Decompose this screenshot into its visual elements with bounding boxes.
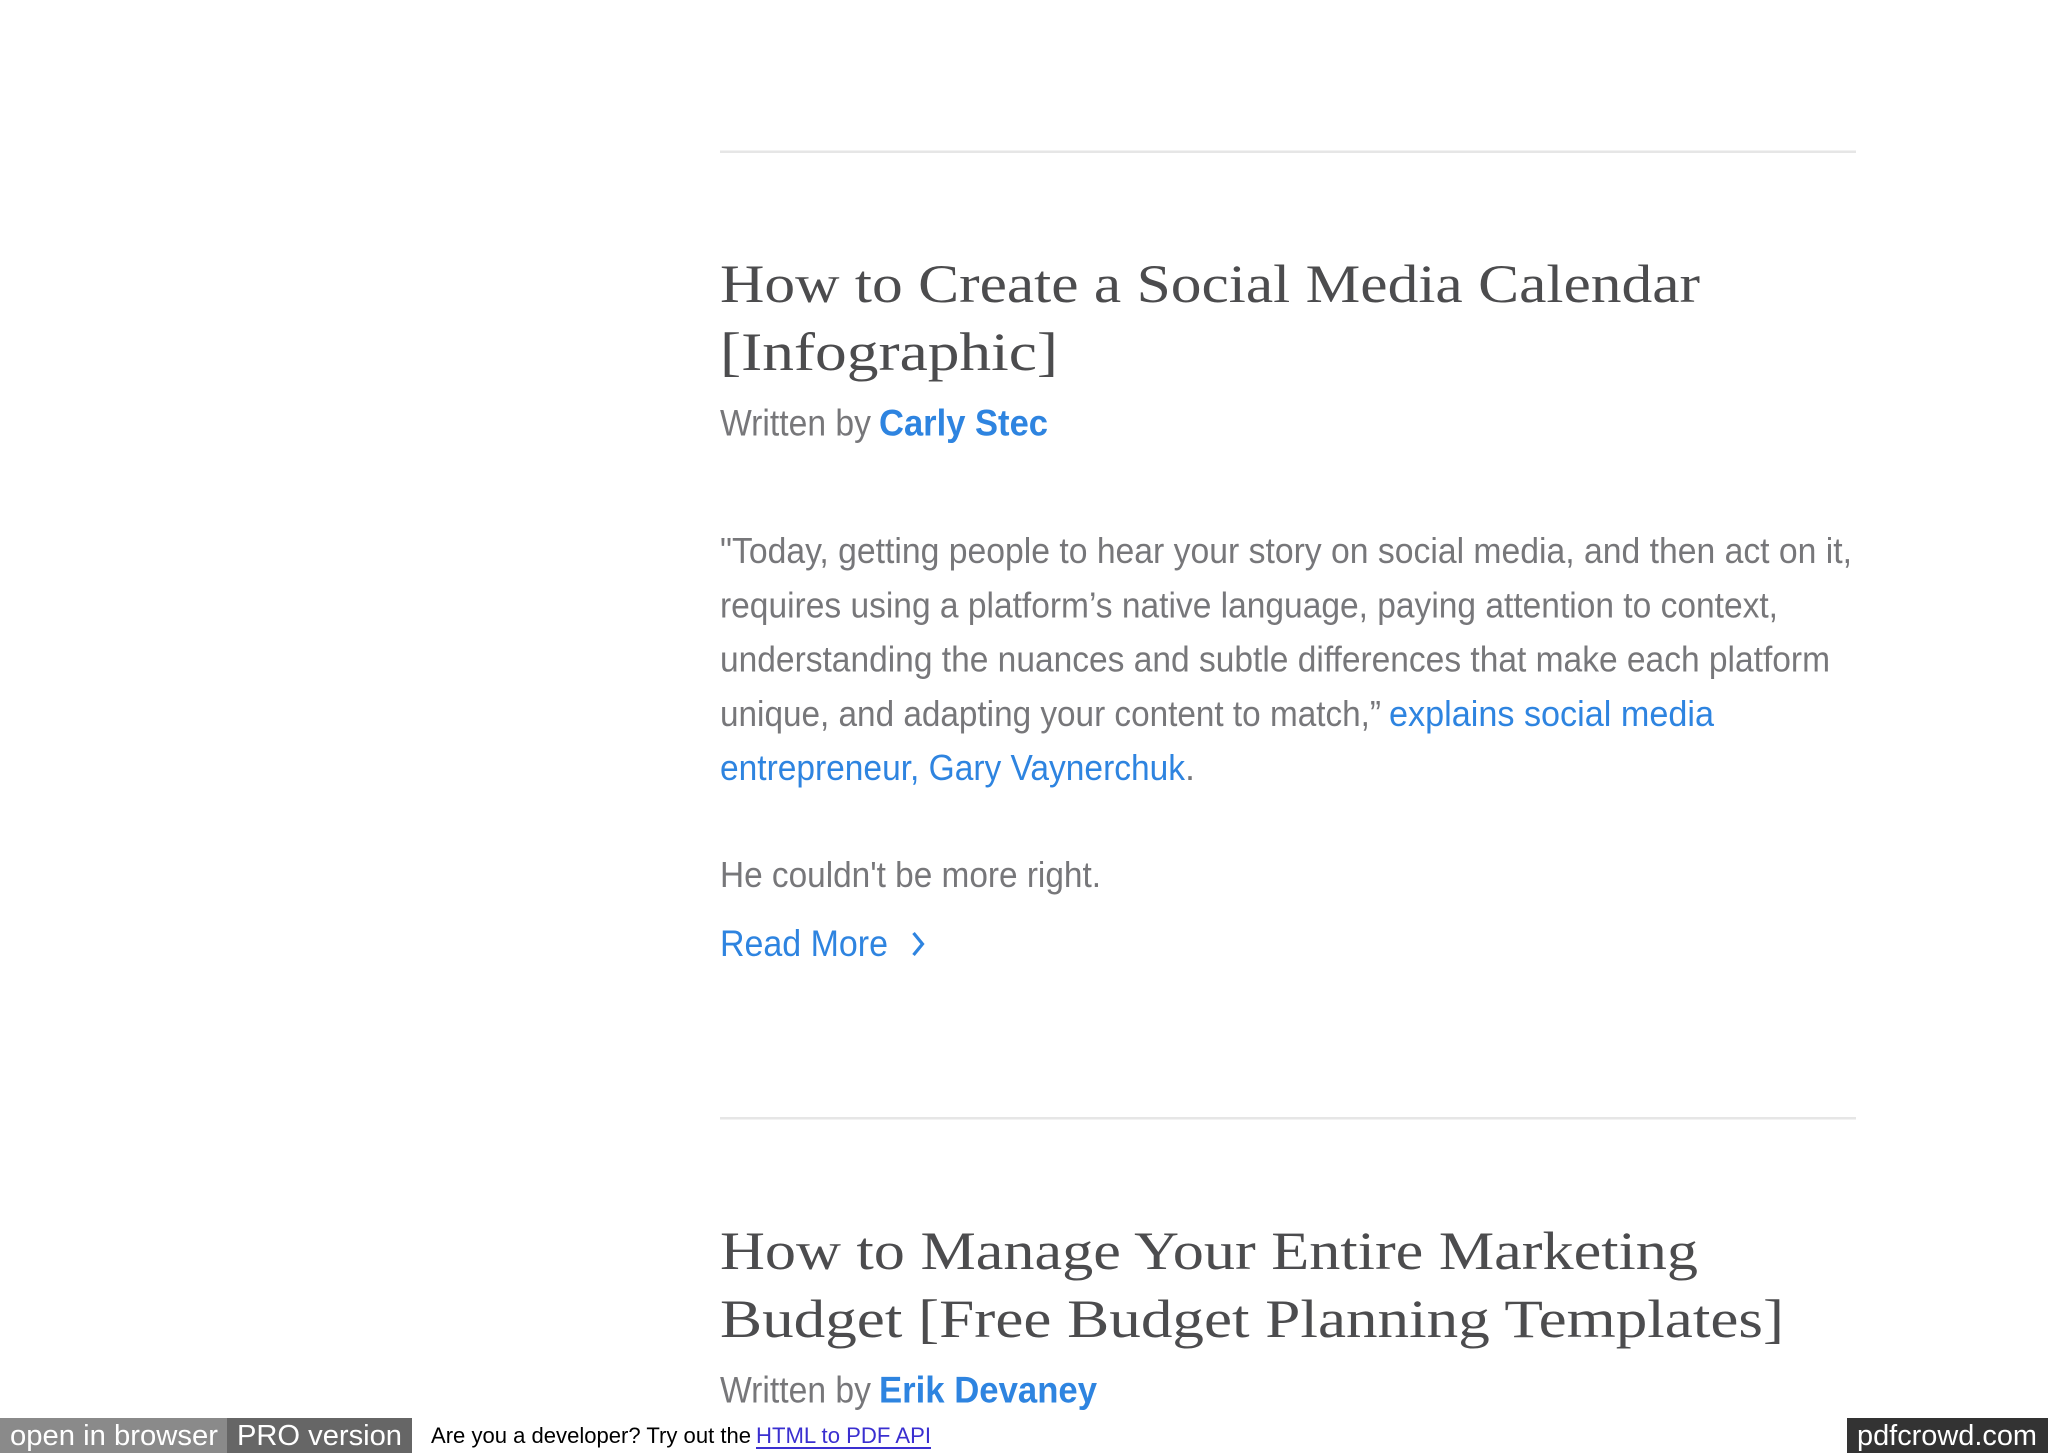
button: PRO version: PRO version <box>237 1420 402 1452</box>
byline: article 2 author <box>720 1370 1097 1410</box>
panel: article 1 <box>720 253 1852 964</box>
heading: article 1 title: How to Create a Social Media Calendar <box>720 253 1700 314</box>
text block: developer promo: Are you a developer? Try out the <box>431 1423 751 1448</box>
button: open in browser: open in browser <box>10 1420 218 1452</box>
text block: article 1 excerpt: . <box>1185 747 1195 788</box>
link: read more: Read More <box>720 923 888 964</box>
byline: article 1 author: Written by <box>720 402 871 444</box>
text block: article 1 excerpt: understanding the nuances and subtle differences that make each platform <box>720 638 1830 680</box>
text block: closing line: He couldn't be more right. <box>720 854 1101 895</box>
heading: article 2 title: How to Manage Your Entire Marketing <box>720 1220 1698 1281</box>
text block: article 1 excerpt: "Today, getting people to hear your story on social media, and then act on it, <box>720 530 1852 571</box>
heading: article 2 title: Budget [Free Budget Planning Templates] <box>720 1288 1784 1349</box>
heading: article 1 title <box>720 253 1700 382</box>
byline: article 1 author <box>720 402 1048 444</box>
byline: article 2 author: Erik Devaney <box>879 1370 1097 1410</box>
text block: article 1 excerpt: entrepreneur, Gary Vaynerchuk <box>720 747 1186 788</box>
text block: article 1 excerpt: explains social media <box>1389 693 1715 734</box>
text block: developer promo <box>431 1423 931 1449</box>
badge: pdfcrowd.com: pdfcrowd.com <box>1857 1420 2037 1452</box>
text block: article 1 excerpt <box>720 530 1852 788</box>
heading: article 2 title <box>720 1220 1784 1349</box>
panel: article 2 <box>720 1220 1784 1410</box>
text block: article 1 excerpt: requires using a platform’s native language, paying attention to context, <box>720 584 1778 626</box>
footer bar: pdfcrowd <box>0 1418 2048 1453</box>
byline: article 2 author: Written by <box>720 1370 871 1410</box>
text block: article 1 excerpt: unique, and adapting your content to match,” <box>720 693 1381 734</box>
byline: article 1 author: Carly Stec <box>879 402 1048 444</box>
icon: chevron right <box>914 933 922 955</box>
text block: developer promo: HTML to PDF API <box>756 1423 931 1448</box>
heading: article 1 title: [Infographic] <box>720 321 1058 382</box>
